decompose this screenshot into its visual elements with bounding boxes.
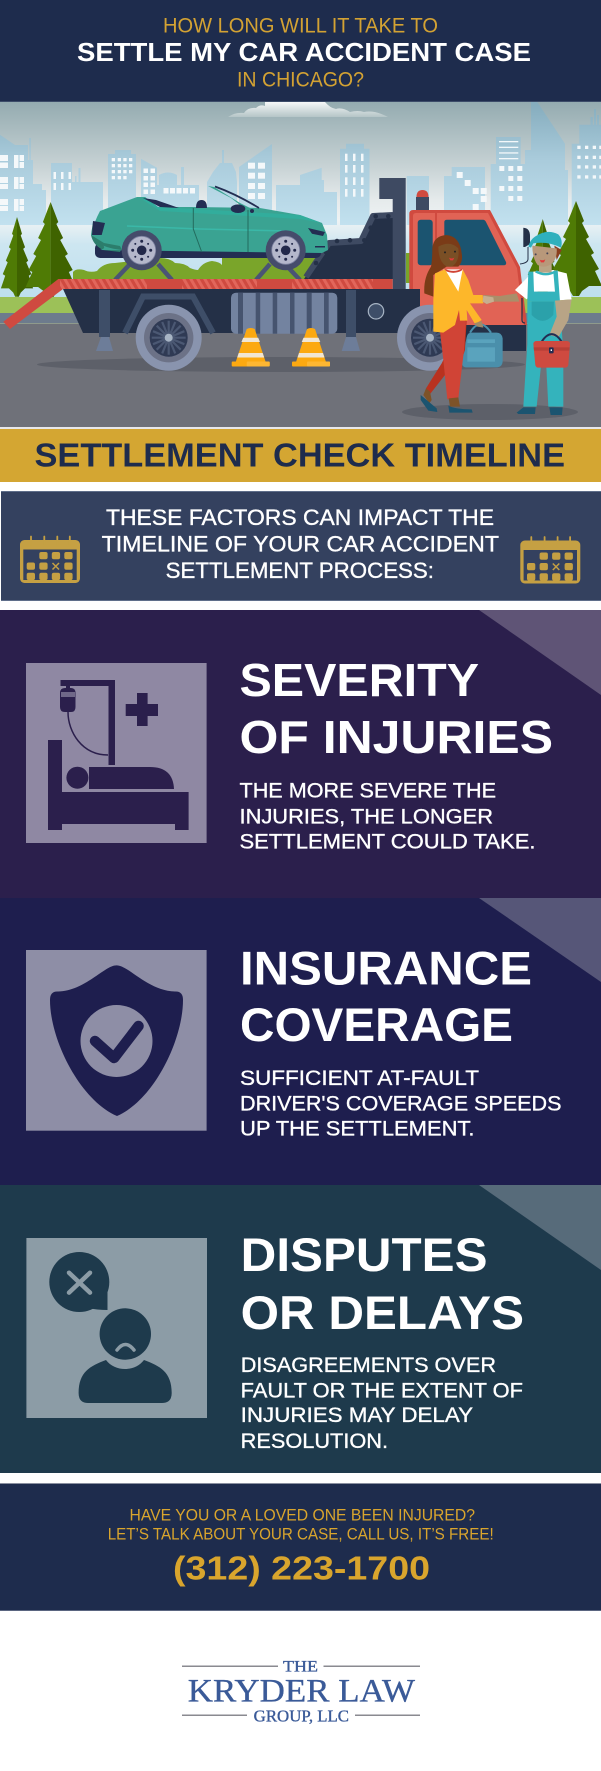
heading: disputes or delays: DISPUTES: [241, 1228, 488, 1281]
panel: disputes or delays: [0, 1185, 601, 1473]
traffic cones: [232, 328, 330, 366]
hero illustration: tow truck scene: [0, 102, 601, 429]
grass and road: [0, 297, 601, 429]
body text: severity: INJURIES, THE LONGER: [240, 803, 493, 828]
woman with bag: [421, 235, 503, 413]
truck wheels: [136, 305, 202, 371]
icon: shield with check: [26, 950, 207, 1131]
man's head and cap: [528, 232, 562, 275]
heading: severity of injuries: [240, 654, 553, 763]
car: [91, 186, 328, 270]
city skyline: [0, 102, 601, 225]
man with toolbox: [483, 270, 572, 415]
intro text: THESE FACTORS CAN IMPACT THE: [106, 505, 494, 530]
heading: severity of injuries: SEVERITY: [240, 654, 479, 706]
call to action text: HAVE YOU OR A LOVED ONE BEEN INJURED?: [130, 1507, 475, 1525]
body text: disputes: INJURIES MAY DELAY: [241, 1402, 473, 1427]
body text: insurance: SUFFICIENT AT-FAULT: [240, 1065, 479, 1090]
banner title: SETTLEMENT CHECK TIMELINE: [34, 437, 565, 474]
panel: factors intro: [1, 491, 601, 601]
body text: severity: THE MORE SEVERE THE: [240, 777, 496, 802]
heading line: in chicago: IN CHICAGO?: [237, 68, 364, 92]
icon: hospital bed: [26, 663, 207, 843]
logo: the kryder law group: THE: [283, 1659, 318, 1676]
call to action text: LET’S TALK ABOUT YOUR CASE, CALL US, IT’S FREE!: [108, 1526, 494, 1544]
heading: disputes or delays: OR DELAYS: [241, 1286, 524, 1339]
panel: settlement check timeline banner: [0, 429, 601, 482]
body text: disputes: FAULT OR THE EXTENT OF: [241, 1378, 523, 1402]
body text: insurance: UP THE SETTLEMENT.: [240, 1115, 474, 1140]
heading line: settle my car accident case: SETTLE MY CAR ACCIDENT CASE: [77, 37, 531, 67]
body text: severity: SETTLEMENT COULD TAKE.: [240, 828, 536, 853]
body text: severity: [240, 777, 536, 853]
heading: insurance coverage: [240, 942, 532, 1051]
heading: disputes or delays: [241, 1228, 524, 1339]
panel: call to action footer: [0, 1483, 601, 1611]
truck deck and chassis: [3, 279, 526, 371]
logo: the kryder law group: KRYDER LAW: [188, 1674, 416, 1710]
icon: calendar right: [520, 537, 580, 584]
body text: insurance: DRIVER'S COVERAGE SPEEDS: [240, 1090, 562, 1115]
heading: severity of injuries: OF INJURIES: [240, 711, 553, 763]
heading: insurance coverage: COVERAGE: [240, 998, 513, 1051]
heading line: how long will it take to: HOW LONG WILL IT TAKE TO: [163, 14, 438, 37]
tow arm and mast: [304, 178, 406, 290]
intro text: [102, 505, 499, 583]
logo: the kryder law group: [182, 1659, 420, 1725]
panel: insurance coverage: [0, 898, 601, 1185]
car support legs: [115, 264, 300, 280]
panel: severity of injuries: [0, 610, 601, 898]
body text: disputes: [241, 1352, 523, 1453]
heading: insurance coverage: INSURANCE: [240, 942, 532, 994]
body text: disputes: DISAGREEMENTS OVER: [241, 1352, 496, 1377]
intro text: TIMELINE OF YOUR CAR ACCIDENT: [102, 531, 499, 556]
icon: person with rejected speech bubble: [26, 1238, 207, 1418]
panel: header: [0, 0, 601, 102]
phone number: (312) 223-1700: [173, 1549, 430, 1586]
ground shadows: [37, 357, 578, 420]
logo: the kryder law group: GROUP, LLC: [254, 1706, 349, 1725]
truck cab: [409, 190, 530, 325]
call to action text: [108, 1507, 494, 1544]
body text: insurance: [240, 1065, 562, 1140]
body text: disputes: RESOLUTION.: [241, 1428, 388, 1453]
icon: calendar left: [20, 536, 80, 583]
cloud: [228, 102, 388, 117]
trees and bushes: [1, 201, 601, 300]
intro text: SETTLEMENT PROCESS:: [166, 558, 434, 583]
